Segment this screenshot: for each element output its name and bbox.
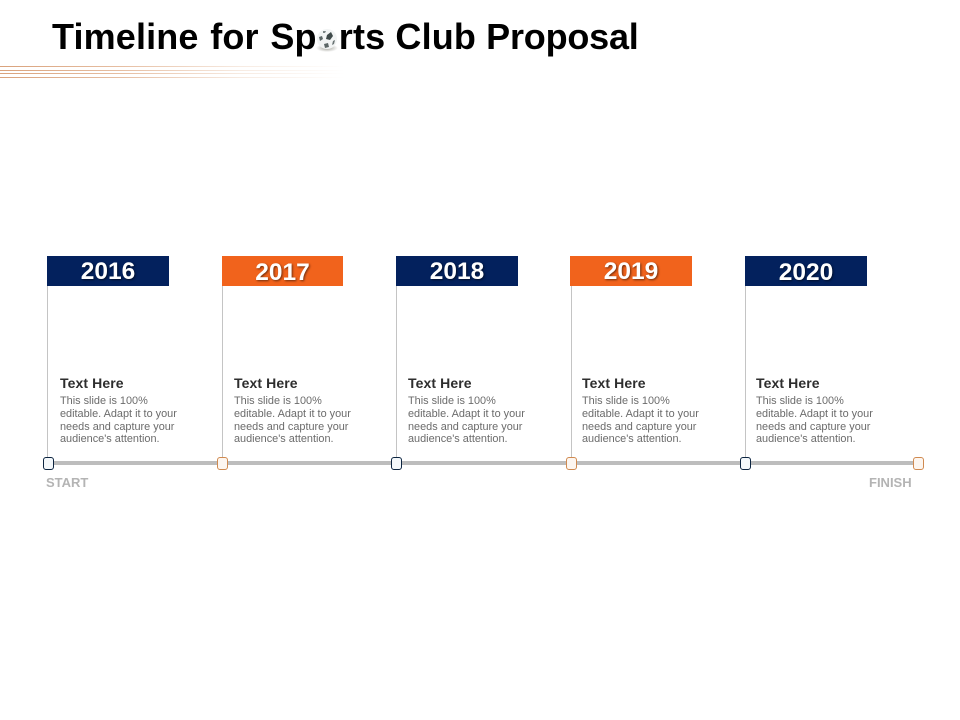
year badge 2016: 2016	[81, 258, 135, 285]
text block 2016: editable. Adapt it to your	[60, 408, 177, 420]
text block 2017	[234, 375, 351, 445]
timeline node 2	[217, 457, 228, 470]
text block 2020: editable. Adapt it to your	[756, 408, 873, 420]
text block 2016: This slide is 100%	[60, 395, 148, 407]
text block 2017: Text Here	[234, 375, 298, 391]
year badge 2019	[570, 256, 692, 286]
title: Timeline for Sports Club Proposal	[52, 16, 639, 57]
text block 2020: audience's attention.	[756, 433, 856, 445]
finish label: FINISH	[869, 475, 912, 490]
text block 2019: editable. Adapt it to your	[582, 408, 699, 420]
start label: START	[46, 475, 88, 490]
text block 2018: editable. Adapt it to your	[408, 408, 525, 420]
timeline node 4	[566, 457, 577, 470]
text block 2017: This slide is 100%	[234, 395, 322, 407]
year badge 2017: 2017	[255, 259, 310, 286]
text block 2019: This slide is 100%	[582, 395, 670, 407]
year badge 2018: 2018	[430, 258, 484, 285]
text block 2019: Text Here	[582, 375, 646, 391]
icon: soccer ball	[317, 29, 337, 52]
text block 2019: needs and capture your	[582, 421, 696, 433]
year badge 2020: 2020	[779, 259, 833, 286]
text block 2016: Text Here	[60, 375, 124, 391]
text block 2020	[756, 375, 873, 445]
text block 2018	[408, 375, 525, 445]
year badge 2019: 2019	[604, 258, 658, 285]
text block 2020: needs and capture your	[756, 421, 870, 433]
text block 2016: audience's attention.	[60, 433, 160, 445]
text block 2016	[60, 375, 177, 445]
text block 2017: editable. Adapt it to your	[234, 408, 351, 420]
text block 2017: audience's attention.	[234, 433, 334, 445]
timeline track	[48, 461, 918, 465]
text block 2019: audience's attention.	[582, 433, 682, 445]
timeline node 1	[43, 457, 54, 470]
timeline node 3	[391, 457, 402, 470]
year badge 2018	[396, 256, 518, 286]
text block 2018: audience's attention.	[408, 433, 508, 445]
header decorative stripes	[0, 66, 316, 78]
text block 2019	[582, 375, 699, 445]
timeline node 6	[913, 457, 924, 470]
text block 2020: This slide is 100%	[756, 395, 844, 407]
timeline node 5	[740, 457, 751, 470]
text block 2016: needs and capture your	[60, 421, 174, 433]
text block 2018: Text Here	[408, 375, 472, 391]
text block 2017: needs and capture your	[234, 421, 348, 433]
text block 2018: needs and capture your	[408, 421, 522, 433]
year badge 2020	[745, 256, 867, 286]
year badge 2017	[222, 256, 343, 286]
text block 2018: This slide is 100%	[408, 395, 496, 407]
text block 2020: Text Here	[756, 375, 820, 391]
year badge 2016	[47, 256, 169, 286]
